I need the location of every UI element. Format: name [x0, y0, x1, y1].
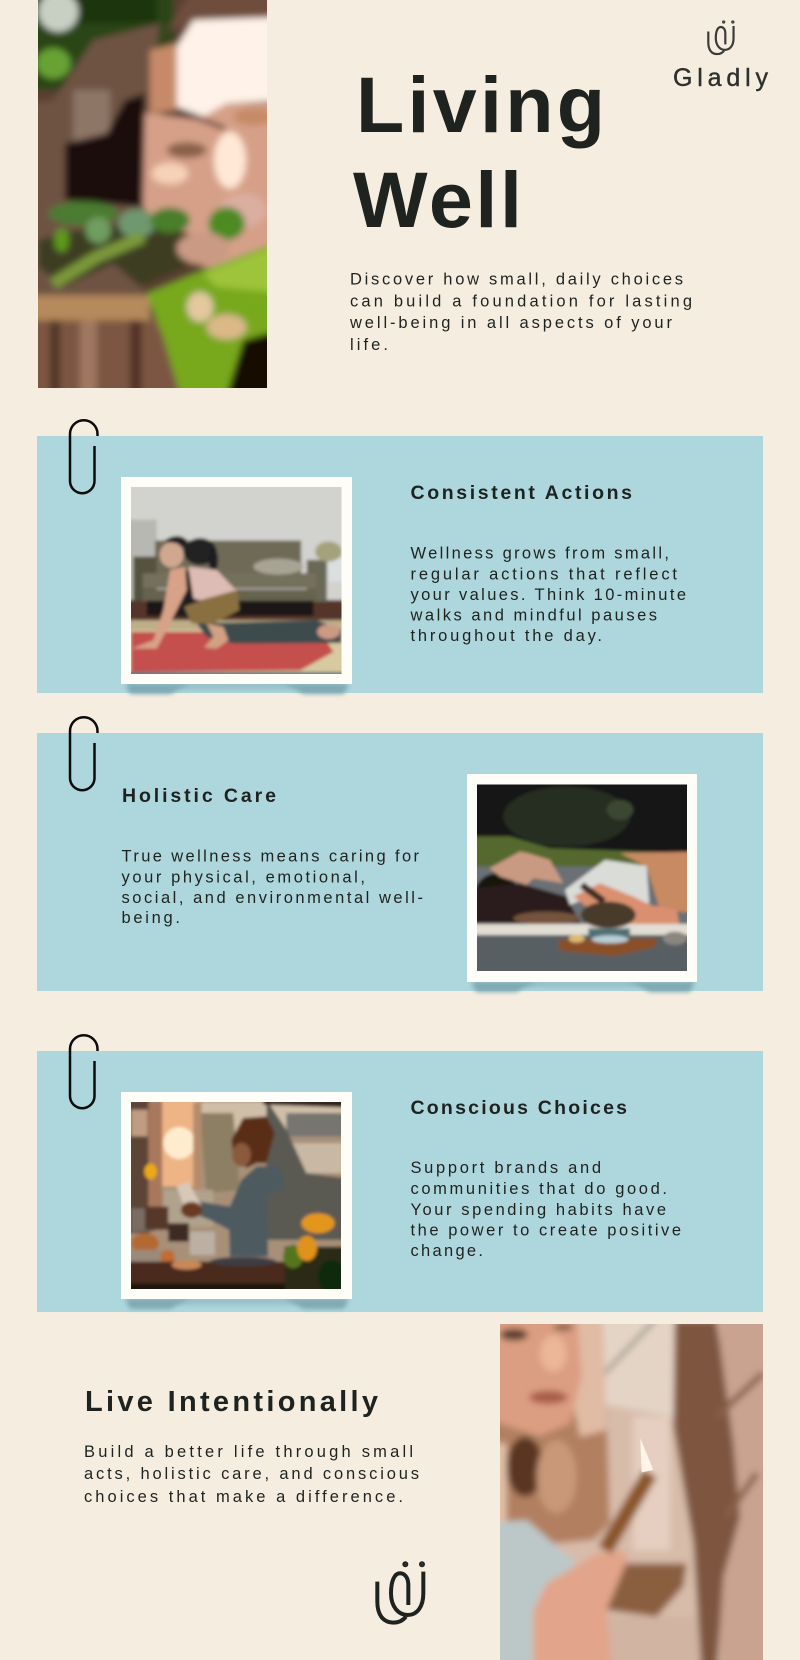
body: conscious choices: Support brands and — [410, 1159, 601, 1177]
closing text: acts, holistic care, and conscious — [84, 1465, 419, 1483]
body: consistent actions: Wellness grows from small, — [410, 544, 669, 562]
body: conscious choices: Your spending habits have — [410, 1201, 666, 1219]
heading: consistent actions: Consistent Actions — [410, 482, 632, 504]
body: holistic care: being. — [122, 909, 180, 927]
panel: conscious choices — [37, 1035, 763, 1312]
body: holistic care: social, and environmental well- — [122, 889, 423, 907]
body: consistent actions — [410, 544, 686, 645]
photo: woman lighting palo santo — [500, 1324, 763, 1660]
body: holistic care: True wellness means caring for — [122, 848, 420, 866]
body: holistic care: your physical, emotional, — [122, 869, 365, 887]
panel: consistent actions — [37, 420, 763, 694]
photo: woman's face behind green leaves — [38, 0, 267, 388]
card shadow — [126, 1297, 348, 1309]
icon: paperclip — [70, 717, 98, 790]
body: consistent actions: throughout the day. — [410, 627, 602, 645]
body: consistent actions: regular actions that reflect — [410, 565, 677, 583]
body: conscious choices: communities that do good. — [410, 1180, 667, 1198]
photo card: woman in sunlit kitchen — [113, 1086, 361, 1303]
panel: holistic care — [37, 717, 763, 992]
heading: conscious choices: Conscious Choices — [410, 1097, 627, 1119]
title: Well — [353, 155, 522, 244]
heading: live intentionally: Live Intentionally — [85, 1386, 378, 1418]
body: conscious choices: change. — [410, 1242, 483, 1260]
icon: paperclip — [70, 420, 98, 493]
intro text: Discover how small, daily choices — [350, 270, 683, 288]
body: consistent actions: walks and mindful pauses — [410, 606, 657, 624]
card shadow — [472, 980, 694, 992]
body: holistic care — [122, 848, 423, 927]
body: consistent actions: your values. Think 10-minute — [410, 586, 686, 604]
intro text: can build a foundation for lasting — [350, 292, 692, 310]
logo: Gladly — [673, 21, 768, 92]
logo mark: bottom — [377, 1563, 423, 1623]
card shadow — [126, 682, 348, 694]
heading: holistic care: Holistic Care — [122, 785, 276, 807]
intro text: well-being in all aspects of your — [349, 314, 672, 332]
intro text — [349, 270, 692, 354]
body: conscious choices — [410, 1159, 681, 1260]
closing text: Build a better life through small — [84, 1443, 413, 1461]
icon: paperclip — [70, 1035, 98, 1108]
title: Living — [356, 60, 605, 149]
closing text: choices that make a difference. — [84, 1488, 403, 1506]
closing text — [84, 1443, 419, 1506]
intro text: life. — [350, 336, 388, 354]
body: conscious choices: the power to create positive — [410, 1222, 681, 1240]
photo card: mother and child yoga — [113, 470, 360, 690]
logo: Gladly: Gladly — [673, 64, 768, 92]
photo card: sound bowl relaxation — [460, 766, 707, 988]
title — [353, 60, 605, 244]
